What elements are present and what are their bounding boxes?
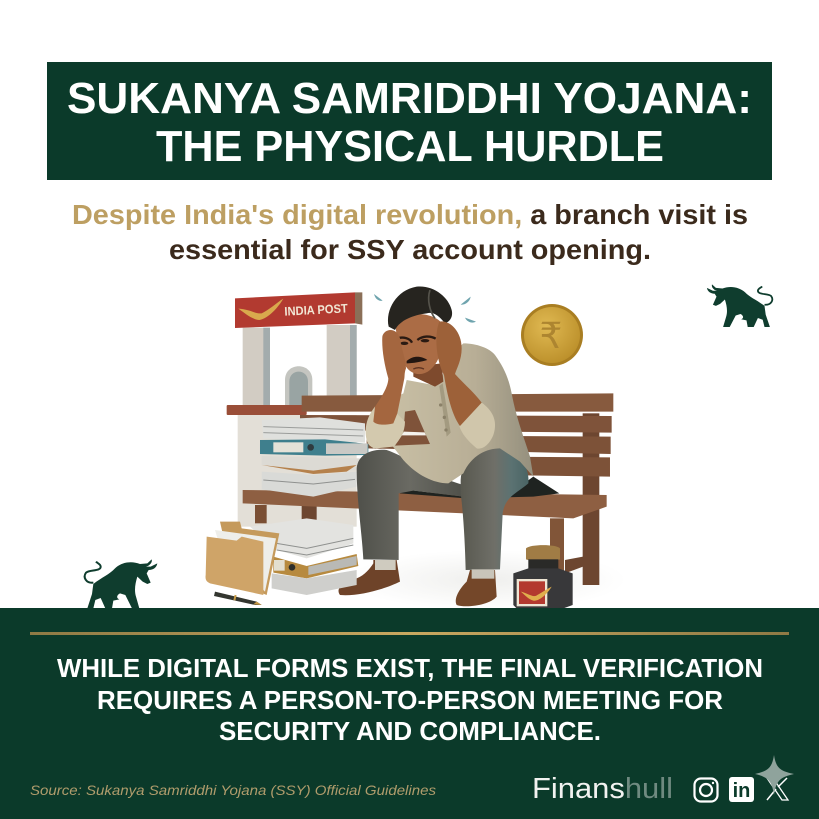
sleeves (366, 407, 405, 448)
India Post sign (235, 292, 362, 328)
title banner (47, 62, 772, 180)
icon: bull bottom left (85, 559, 157, 608)
icon: rupee coin (521, 304, 583, 366)
right trouser leg (461, 448, 529, 570)
stacked files on bench (260, 417, 368, 497)
hair (388, 287, 452, 330)
icon: bull top right (707, 284, 772, 327)
footer statement: WHILE DIGITAL FORMS EXIST, THE FINAL VERIFICATION (57, 653, 763, 683)
title banner: SUKANYA SAMRIDDHI YOJANA: (67, 75, 752, 123)
subtitle text (72, 199, 748, 265)
right arm and hand (436, 321, 482, 426)
floor shadow (347, 550, 627, 610)
India Post sign: INDIA POST (284, 301, 348, 319)
title banner: THE PHYSICAL HURDLE (156, 123, 664, 171)
man (339, 287, 559, 606)
left arm and hand (373, 330, 406, 425)
icon: linkedin: in (733, 780, 750, 802)
ink bottle (513, 545, 573, 608)
footer statement (57, 653, 763, 746)
brand name: Finanshull (532, 773, 673, 805)
illustration: stressed man at post office (206, 287, 627, 610)
icon: linkedin (729, 777, 754, 802)
floor papers and folder (206, 518, 358, 605)
folder (220, 522, 279, 595)
footer statement: REQUIRES A PERSON-TO-PERSON MEETING FOR (97, 685, 723, 715)
shirt tail shadow (397, 477, 559, 498)
icon: instagram (694, 778, 718, 802)
footer panel (0, 608, 819, 819)
icon: sparkle star (755, 755, 794, 795)
left trouser leg (357, 450, 463, 560)
subtitle text: Despite India's digital revolution, a branch visit is (72, 199, 748, 230)
post office counter (227, 325, 357, 527)
icon: X (767, 778, 788, 800)
subtitle text: essential for SSY account opening. (169, 234, 651, 265)
icon: rupee coin: ₹ (540, 316, 562, 357)
footer statement: SECURITY AND COMPLIANCE. (219, 716, 601, 746)
shoes (339, 560, 400, 595)
gold divider (30, 632, 789, 635)
pen (214, 592, 262, 605)
neck and face (413, 363, 443, 387)
sweat drops (374, 294, 476, 323)
bench seen between arm and torso (395, 410, 430, 446)
bench (243, 393, 613, 585)
source note: Source: Sukanya Samriddhi Yojana (SSY) Official Guidelines (30, 782, 436, 798)
shirt (366, 343, 533, 483)
